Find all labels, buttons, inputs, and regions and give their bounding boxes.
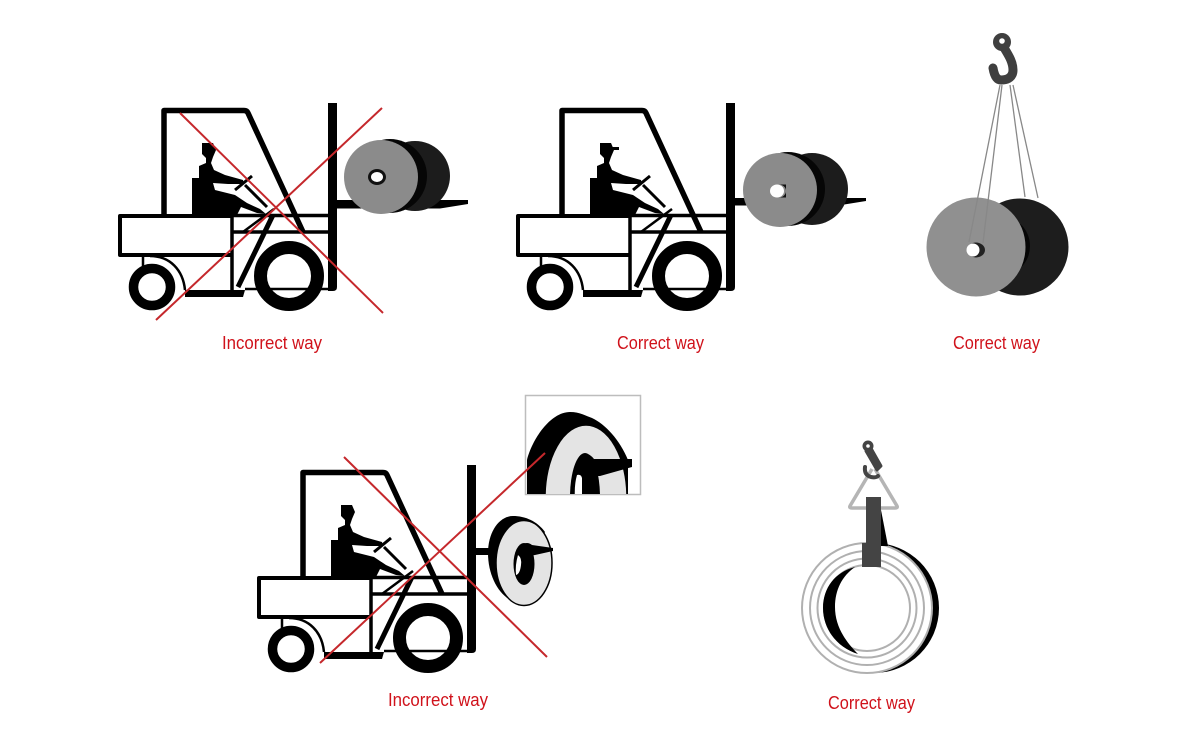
red cross mark [320, 453, 547, 663]
panel: coil hung by strap [802, 440, 939, 673]
inset detail box [524, 394, 642, 496]
coil shadow [970, 216, 1030, 276]
forklift truck [259, 465, 476, 668]
coil on fork [743, 152, 848, 227]
caption: incorrect way 4: Incorrect way [388, 690, 488, 710]
strap shadow [881, 510, 888, 546]
back edge of coil [809, 543, 939, 673]
fork arm [337, 200, 468, 208]
panel: forklift incorrect way, coil eye sideways [259, 396, 640, 668]
panel: forklift incorrect way, coil face forward [120, 103, 468, 320]
lifting strap [862, 497, 881, 567]
forklift truck [518, 103, 735, 306]
caption: correct way 3: Correct way [953, 333, 1040, 353]
coil eye [966, 242, 985, 258]
coil side on [488, 516, 553, 606]
coil on forks [344, 139, 450, 214]
driver cap brim [611, 147, 619, 150]
ropes [969, 85, 1038, 243]
crane hook [862, 440, 881, 477]
back disc of coil [972, 198, 1068, 296]
triangular lifting link [850, 469, 897, 508]
inner crescent shadow [823, 567, 858, 654]
forklift truck [120, 103, 337, 306]
caption: correct way 2: Correct way [617, 333, 704, 353]
front disc of coil [926, 198, 1026, 296]
panel: forklift correct way, coil through eye [518, 103, 866, 306]
panel: coil hung from hook with ropes [926, 33, 1068, 296]
red cross mark [156, 108, 383, 320]
hook [993, 33, 1013, 80]
fork arm [735, 198, 866, 206]
carriage bar [476, 548, 500, 555]
caption: incorrect way 1: Incorrect way [222, 333, 322, 353]
caption: correct way 5: Correct way [828, 693, 915, 713]
concentric coil rings [802, 543, 932, 673]
